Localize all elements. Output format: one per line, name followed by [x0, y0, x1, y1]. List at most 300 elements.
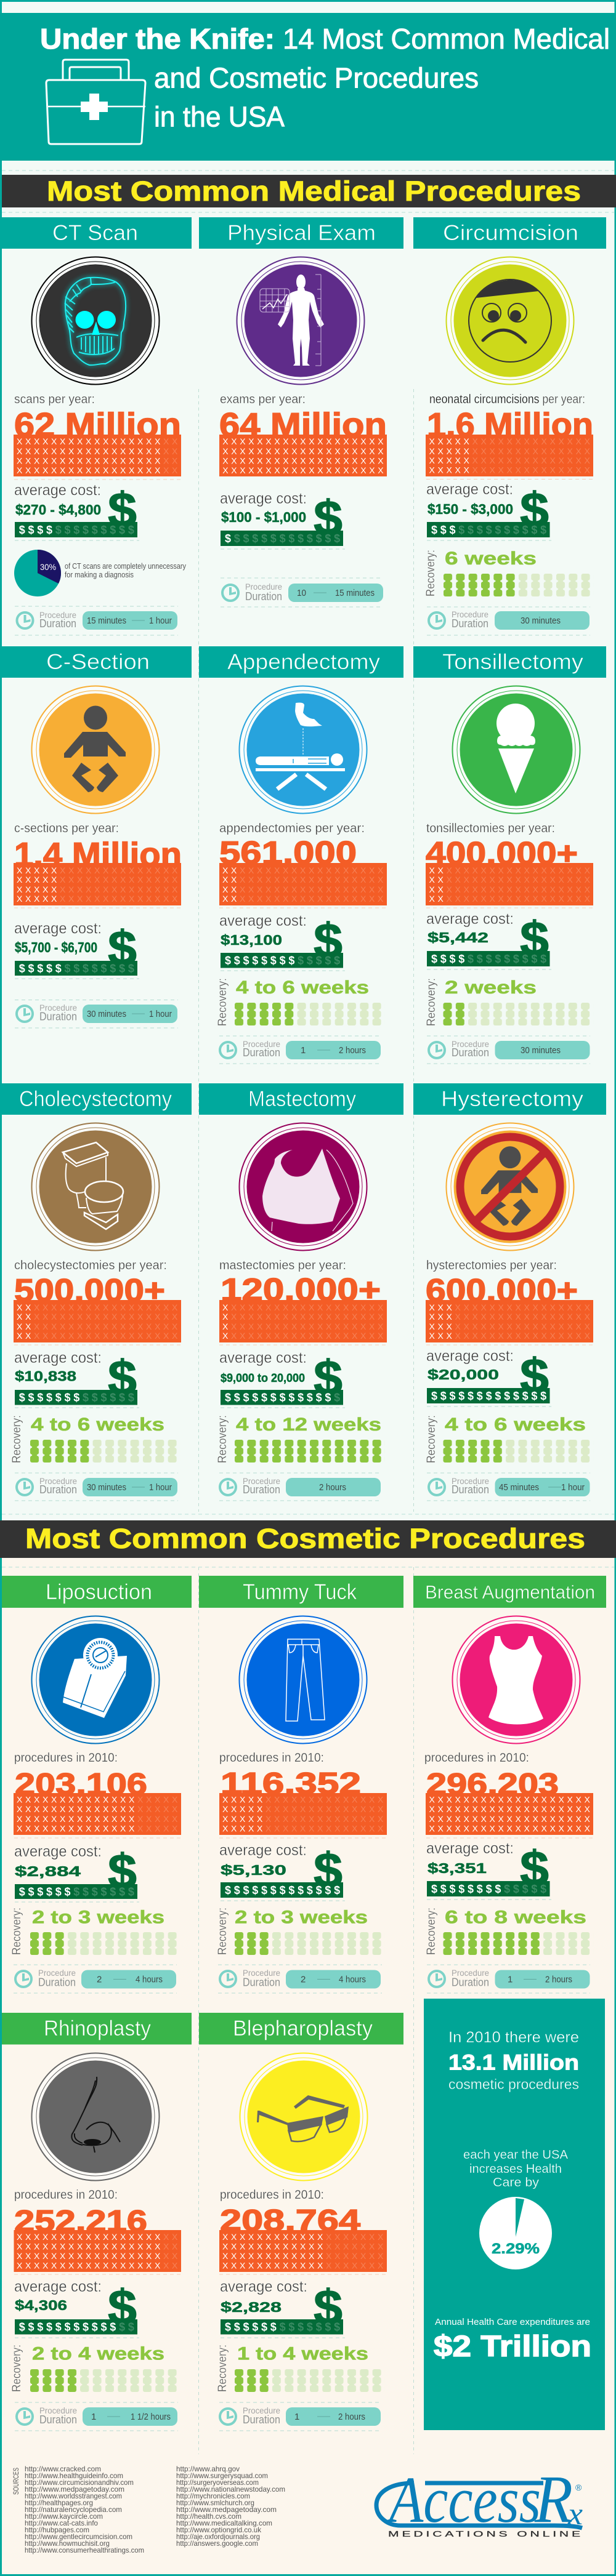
icon: medical briefcase [46, 60, 145, 144]
cost: $ [314, 2280, 342, 2335]
label: procedures in 2010: [219, 1751, 324, 1765]
duration: Procedure [243, 2405, 280, 2415]
duration [15, 606, 178, 635]
icon: toilet [32, 1123, 159, 1251]
recovery [10, 1907, 180, 1955]
stat: appendectomies per year: XXXXXXXXXXXXXXXXXXX [222, 865, 386, 875]
recovery: Recovery: [10, 2345, 23, 2392]
duration: 15 minutes [335, 588, 375, 598]
duration: 2 hours [339, 1045, 366, 1056]
stat: mastectomies per year [219, 1272, 388, 1345]
recovery: 4 to 6 weeks [236, 977, 369, 998]
heading [199, 2013, 403, 2045]
stat: cholecystectomies per year: XXXXXXXXXXXXXXXXXXX [17, 1331, 180, 1341]
stat: neonatal circumcisions per year: XXXXXXXXXXXXXXXXXXX [429, 465, 593, 475]
section heading: cosmetic: Most Common Cosmetic Procedures [25, 1523, 585, 1554]
duration: 1 [508, 1975, 513, 1984]
icon: tank top [452, 1616, 580, 1743]
sources: http://healthpages.org [25, 2498, 93, 2507]
heading: Rhinoplasty [44, 2016, 151, 2040]
cost: $$$$$$$$$$$$$ [431, 1883, 549, 1895]
stat: appendectomies per year: 561,000 [219, 835, 357, 871]
stat: 2 trillion: Annual Health Care expenditures are [435, 2317, 590, 2327]
cost: $ [520, 912, 549, 966]
stat: 13.1 million: In 2010 there were [448, 2029, 579, 2046]
recovery [216, 1907, 385, 1955]
icon: baby [32, 686, 159, 814]
recovery: Recovery: [216, 2345, 229, 2392]
duration: 1 hour [561, 1482, 585, 1493]
cost: $ [314, 1350, 342, 1405]
panel: summary statistics [424, 1999, 605, 2430]
stat: exams per year: 64 Million [219, 406, 387, 444]
pie chart: 2.29% [479, 2197, 552, 2269]
heading [199, 217, 403, 249]
cost: $4,306 [15, 2297, 67, 2313]
label: procedures in 2010: [424, 1751, 529, 1765]
cost: $$$$$$$$$$$$$ [225, 1884, 343, 1896]
duration: 10 [297, 588, 306, 598]
duration: 2 [97, 1975, 102, 1984]
duration: Procedure [245, 582, 282, 592]
logo: AccessRx: Access [386, 2463, 541, 2537]
cost: average cost: [220, 490, 307, 507]
cost: $$$$$$$$$$$$$ [225, 954, 343, 966]
icon: jeans [239, 1616, 367, 1743]
title: and Cosmetic Procedures [154, 62, 479, 94]
sources: http://www.worldsstrangest.com [25, 2492, 122, 2500]
cost [219, 1842, 345, 1901]
duration: 4 hours [136, 1975, 163, 1984]
stat: cholecystectomies per year: 500,000+ [14, 1273, 165, 1309]
duration [221, 578, 383, 607]
heading [413, 1576, 606, 1608]
sources: http://www.circumcisionandhiv.com [25, 2478, 134, 2487]
stat: 2 trillion [434, 2317, 591, 2363]
stat: procedures in 2010: 252,216 [14, 2205, 147, 2238]
stat: procedures in 2010: XXXXXXXXXXXXXXXXXXX [17, 2242, 180, 2252]
duration [219, 2402, 382, 2431]
cost [219, 1349, 345, 1408]
text: yearly increase: increases Health [469, 2162, 562, 2176]
heading [2, 1576, 192, 1608]
sources: http://www.nationalnewstoday.com [176, 2485, 285, 2494]
pie chart: 30% unnecessary [14, 550, 186, 596]
stat: scans per year: XXXXXXXXXXXXXXXXXXX [17, 455, 180, 465]
cost: $5,700 - $6,700 [15, 939, 97, 955]
stat: appendectomies per year: XXXXXXXXXXXXXXXXXXX [222, 885, 386, 894]
stat: procedures in 2010 [219, 1767, 388, 1838]
stat: procedures in 2010: XXXXXXXXXXXXXXXXXXX [17, 1804, 180, 1814]
recovery: Recovery: [216, 1908, 229, 1955]
cost: average cost: [219, 912, 307, 929]
stat: hysterectomies per year: XXXXXXXXXXXXXXXXXXX [429, 1322, 593, 1331]
cost: $ [108, 1844, 137, 1899]
title: 14 Most Common Medical [283, 23, 610, 55]
cost: $ [108, 483, 137, 537]
cost: $ [314, 913, 342, 968]
recovery [425, 1907, 593, 1955]
cost: $270 - $4,800 [15, 502, 101, 518]
duration [219, 1473, 382, 1501]
sources: SOURCES [12, 2468, 20, 2495]
duration: Procedure [39, 1003, 77, 1013]
duration [15, 2402, 178, 2431]
stat: exams per year: XXXXXXXXXXXXXXXXXXX [222, 465, 386, 475]
heading: Tummy Tuck [243, 1580, 357, 1604]
stat: tonsillectomies per year: XXXXXXXXXXXXXXXXXXX [429, 865, 593, 875]
stat: mastectomies per year: XXXXXXXXXXXXXXXXXXX [222, 1331, 386, 1341]
cost: $$$$$$$$$$$$$ [19, 2321, 137, 2333]
stat: exams per year [219, 406, 387, 476]
cost: $$$$$$$$$$$$$ [431, 953, 549, 965]
panel: Mastectomy [199, 1083, 403, 1501]
recovery: 6 weeks [445, 548, 537, 569]
stat: hysterectomies per year: XXXXXXXXXXXXXXXXXXX [429, 1312, 593, 1322]
duration: Duration [39, 2413, 77, 2426]
duration: Duration [38, 1976, 76, 1988]
cost: $5,130 [221, 1862, 286, 1878]
stat: procedures in 2010: XXXXXXXXXXXXXXXXXXX [222, 2251, 386, 2261]
recovery [216, 977, 385, 1026]
icon: body with chart [237, 257, 365, 384]
cost: average cost: [219, 1842, 307, 1859]
duration [15, 1473, 178, 1501]
stat: appendectomies per year [219, 835, 388, 908]
duration: 30 minutes [521, 1045, 561, 1056]
duration [427, 1473, 590, 1501]
recovery: 2 to 3 weeks [32, 1907, 164, 1928]
stat: scans per year: 62 Million [14, 406, 181, 444]
cost: $ [520, 1349, 549, 1403]
stat: procedures in 2010 [14, 1768, 182, 1838]
stat: c-sections per year: XXXXXXXXXXXXXXXXXXX [17, 885, 180, 894]
heading: Cholecystectomy [19, 1087, 172, 1111]
stat: mastectomies per year: XXXXXXXXXXXXXXXXXXX [222, 1322, 386, 1331]
cost [219, 912, 345, 971]
icon: no baby sign [446, 1123, 574, 1251]
duration: 1 [91, 2412, 96, 2422]
text: yearly increase [463, 2148, 569, 2189]
stat: c-sections per year [14, 835, 182, 908]
duration: 2 hours [319, 1482, 346, 1493]
stat: procedures in 2010 [219, 2204, 388, 2274]
cost [426, 481, 551, 540]
cost: average cost: [426, 481, 513, 498]
sources: http://www.optiongrid.co.uk [176, 2526, 262, 2534]
sources: http://www.medpagetoday.com [25, 2485, 124, 2494]
sources: http://www.medicaltalking.com [176, 2519, 272, 2527]
cost: $ [108, 921, 137, 976]
cost: $100 - $1,000 [221, 509, 306, 525]
recovery: Recovery: [10, 1415, 23, 1463]
cost: $20,000 [428, 1366, 499, 1382]
panel: Appendectomy [199, 646, 403, 1064]
label: mastectomies per year: [219, 1259, 346, 1272]
icon: glasses [240, 2053, 367, 2180]
stat: procedures in 2010: 208,764 [220, 2204, 360, 2237]
cost: $$$$$$$$$$$$$ [19, 1886, 137, 1898]
sources: http://www.cracked.com [25, 2465, 101, 2473]
stat: cholecystectomies per year: XXXXXXXXXXXXXXXXXXX [17, 1302, 180, 1312]
heading [2, 1083, 192, 1115]
cost [14, 920, 139, 979]
duration [218, 1965, 382, 1993]
stat: procedures in 2010: XXXXXXXXXXXXXXXXXXX [17, 2260, 180, 2270]
cost: average cost: [14, 1843, 102, 1860]
stat: tonsillectomies per year: XXXXXXXXXXXXXXXXXXX [429, 875, 593, 885]
label: procedures in 2010: [14, 1751, 118, 1765]
logo: AccessRx [376, 2462, 583, 2538]
sources [12, 2465, 285, 2554]
stat: hysterectomies per year: 600,000+ [426, 1273, 578, 1309]
stat: procedures in 2010: XXXXXXXXXXXXXXXXXXX [429, 1823, 593, 1833]
recovery [425, 1414, 593, 1463]
recovery: 4 to 6 weeks [445, 1414, 586, 1435]
duration: 2 hours [338, 2412, 365, 2422]
cost: average cost: [14, 920, 102, 937]
panel: Hysterectomy [413, 1083, 606, 1501]
cost: $2,884 [15, 1863, 81, 1879]
sources: http://hubpages.com [25, 2526, 89, 2534]
label: appendectomies per year: [219, 822, 365, 835]
recovery: Recovery: [425, 1415, 438, 1463]
duration: Procedure [452, 1968, 489, 1978]
cost [14, 481, 139, 540]
duration: Procedure [39, 2405, 77, 2415]
recovery [216, 1414, 385, 1463]
duration: Procedure [243, 1968, 280, 1978]
cost: $$$$$$$$$$$$$ [225, 1391, 343, 1403]
heading: Blepharoplasty [233, 2016, 373, 2040]
cost: $ [108, 1350, 137, 1405]
panel: Breast Augmentation [413, 1576, 606, 1993]
sources: http://naturalencyclopedia.com [25, 2505, 122, 2514]
pie chart: 2.29%: 2.29% [492, 2241, 540, 2257]
heading [2, 2013, 192, 2045]
logo: AccessRx: x [567, 2497, 583, 2532]
cost: $150 - $3,000 [428, 501, 513, 517]
recovery: 2 to 3 weeks [235, 1907, 368, 1928]
logo: AccessRx: MEDICATIONS ONLINE [388, 2529, 583, 2538]
panel: Liposuction [2, 1576, 192, 1993]
logo: AccessRx: ® [575, 2482, 582, 2492]
duration [219, 1036, 382, 1064]
icon: ice cream cone [452, 686, 580, 814]
stat: procedures in 2010: XXXXXXXXXXXXXXXXXXX [222, 2232, 386, 2242]
cost: $9,000 to 20,000 [221, 1372, 305, 1385]
cost: $10,838 [15, 1368, 76, 1384]
stat: scans per year: XXXXXXXXXXXXXXXXXXX [17, 446, 180, 456]
cost: average cost: [426, 910, 514, 928]
stat: procedures in 2010 [14, 2205, 182, 2274]
panel: Rhinoplasty [2, 2013, 192, 2431]
recovery: Recovery: [10, 1908, 23, 1955]
text: yearly increase: each year the USA [463, 2148, 569, 2162]
duration [15, 1000, 178, 1028]
cost: average cost: [426, 1347, 514, 1365]
cost: $3,351 [428, 1860, 487, 1876]
heading [199, 646, 403, 678]
heading: C-Section [46, 650, 150, 674]
sources: http://aje.oxfordjournals.org [176, 2532, 260, 2541]
heading [413, 646, 606, 678]
cost: average cost: [219, 1349, 307, 1366]
label: c-sections per year: [14, 822, 119, 835]
duration: Duration [452, 617, 488, 630]
duration: Duration [243, 1976, 280, 1988]
stat: scans per year: XXXXXXXXXXXXXXXXXXX [17, 465, 180, 475]
stat: 13.1 million: cosmetic procedures [448, 2076, 579, 2092]
sources: http://www.kaycircle.com [25, 2512, 103, 2521]
duration: 30 minutes [521, 616, 561, 626]
icon: sad face [446, 257, 574, 384]
recovery: 4 to 6 weeks [31, 1414, 164, 1435]
stat: tonsillectomies per year [426, 836, 594, 908]
pie chart: 30% unnecessary: for making a diagnosis [65, 570, 134, 579]
duration: 1 1/2 hours [131, 2412, 171, 2422]
section heading: cosmetic [0, 1520, 616, 1558]
heading [413, 217, 606, 249]
stat: scans per year: XXXXXXXXXXXXXXXXXXX [17, 436, 180, 446]
duration: Procedure [452, 1476, 489, 1486]
sources: http://surgeryoverseas.com [176, 2478, 259, 2487]
logo: AccessRx: R [534, 2462, 573, 2537]
label: hysterectomies per year: [426, 1259, 557, 1272]
cost: $$$$$$$$$$$$$ [19, 1391, 137, 1403]
recovery: 4 to 12 weeks [236, 1414, 381, 1435]
cost [220, 490, 345, 549]
pie chart: 30% unnecessary: 30% [40, 562, 56, 572]
duration: Duration [39, 1011, 77, 1023]
recovery [425, 977, 593, 1026]
duration: 1 hour [149, 1009, 172, 1019]
duration: 1 hour [149, 616, 172, 626]
duration: Duration [243, 1046, 280, 1059]
text: yearly increase: Care by [493, 2176, 539, 2189]
cost: $ [314, 1843, 342, 1898]
panel: Tummy Tuck [199, 1576, 403, 1993]
recovery [424, 548, 594, 596]
stat: procedures in 2010 [426, 1768, 594, 1838]
stat: procedures in 2010: XXXXXXXXXXXXXXXXXXX [222, 1814, 386, 1824]
icon: appendix and operating table [239, 686, 367, 814]
heading: Breast Augmentation [425, 1581, 595, 1603]
icon: sports bra [239, 1123, 367, 1251]
panel: Physical Exam [199, 217, 403, 607]
duration: Duration [243, 2413, 280, 2426]
duration: Procedure [39, 610, 76, 620]
cost: $$$$$$$$$$$$$ [19, 963, 137, 975]
heading: Liposuction [46, 1580, 152, 1604]
duration [427, 1036, 590, 1064]
duration: Duration [245, 590, 282, 603]
stat: neonatal circumcisions per year: XXXXXXXXXXXXXXXXXXX [429, 455, 593, 465]
recovery: 2 weeks [445, 977, 537, 998]
cost: $$$$$$$$$$$$$ [19, 524, 137, 536]
cost: average cost: [220, 2278, 307, 2295]
stat: procedures in 2010: XXXXXXXXXXXXXXXXXXX [429, 1795, 593, 1805]
recovery [10, 1414, 180, 1463]
sources: http://www.howmuchisit.org [25, 2539, 110, 2548]
panel: CT Scan [2, 217, 192, 635]
heading [2, 217, 192, 249]
stat: tonsillectomies per year: XXXXXXXXXXXXXXXXXXX [429, 885, 593, 894]
stat: procedures in 2010: XXXXXXXXXXXXXXXXXXX [429, 1814, 593, 1824]
cost: $5,442 [428, 929, 488, 945]
title [40, 23, 610, 133]
duration: Duration [39, 1483, 77, 1496]
duration: Procedure [243, 1476, 280, 1486]
stat: procedures in 2010: XXXXXXXXXXXXXXXXXXX [429, 1804, 593, 1814]
duration [427, 607, 590, 635]
heading: Hysterectomy [441, 1087, 584, 1111]
cost: $ [108, 2280, 137, 2335]
cost: average cost: [14, 2278, 102, 2295]
sources: http://www.medpagetoday.com [176, 2505, 277, 2514]
recovery: Recovery: [216, 1415, 229, 1463]
cost [14, 1349, 139, 1408]
duration: 2 hours [545, 1975, 572, 1984]
sources: http://www.smlchurch.org [176, 2498, 254, 2507]
cost [220, 2278, 345, 2338]
icon: bathroom scale [32, 1616, 159, 1743]
stat: procedures in 2010: XXXXXXXXXXXXXXXXXXX [222, 2260, 386, 2270]
heading [199, 1083, 403, 1115]
pie chart: 30% unnecessary: of CT scans are completely unnecessary [65, 561, 186, 571]
cost: $$$$$$$$$$$$$ [431, 524, 549, 536]
stat: exams per year: XXXXXXXXXXXXXXXXXXX [222, 455, 386, 465]
heading: Tonsillectomy [442, 650, 584, 674]
stat: cholecystectomies per year: XXXXXXXXXXXXXXXXXXX [17, 1322, 180, 1331]
icon: nose [32, 2053, 159, 2180]
cost: $$$$$$$$$$$$$ [225, 532, 343, 545]
duration: Procedure [38, 1968, 76, 1978]
panel: Tonsillectomy [413, 646, 606, 1064]
cost: average cost: [426, 1840, 514, 1857]
stat: procedures in 2010: XXXXXXXXXXXXXXXXXXX [17, 1823, 180, 1833]
heading [199, 1576, 403, 1608]
sources: http://www.cat-cats.info [25, 2519, 98, 2527]
section heading: medical: Most Common Medical Procedures [47, 175, 581, 207]
stat: cholecystectomies per year [14, 1273, 182, 1345]
label: tonsillectomies per year: [426, 822, 555, 835]
stat: tonsillectomies per year: XXXXXXXXXXXXXXXXXXX [429, 894, 593, 904]
recovery: 2 to 4 weeks [32, 2344, 164, 2364]
stat: mastectomies per year: XXXXXXXXXXXXXXXXXXX [222, 1302, 386, 1312]
stat: hysterectomies per year [426, 1273, 594, 1345]
duration: 30 minutes [87, 1482, 126, 1493]
cost: $$$$$$$$$$$$$ [431, 1390, 549, 1402]
panel: C-Section [2, 646, 192, 1028]
cost: $ [520, 1841, 549, 1896]
sources: http://mychronicles.com [176, 2492, 250, 2500]
stat: neonatal circumcisions per year: 1.6 Million [427, 406, 593, 444]
stat: c-sections per year: XXXXXXXXXXXXXXXXXXX [17, 894, 180, 904]
stat: mastectomies per year: 120,000+ [221, 1272, 381, 1308]
label: exams per year: [220, 393, 306, 406]
stat: procedures in 2010: 203,106 [15, 1768, 147, 1801]
sources: http://www.gentlecircumcision.com [25, 2532, 132, 2541]
cost: average cost: [14, 481, 101, 499]
panel: Cholecystectomy [2, 1083, 192, 1501]
cost: $$$$$$$$$$$$$ [225, 2321, 343, 2333]
duration: 4 hours [339, 1975, 366, 1984]
cost: $2,828 [221, 2299, 282, 2315]
duration: 1 hour [149, 1482, 172, 1493]
stat: procedures in 2010: XXXXXXXXXXXXXXXXXXX [222, 1795, 386, 1805]
duration: 15 minutes [87, 616, 126, 626]
